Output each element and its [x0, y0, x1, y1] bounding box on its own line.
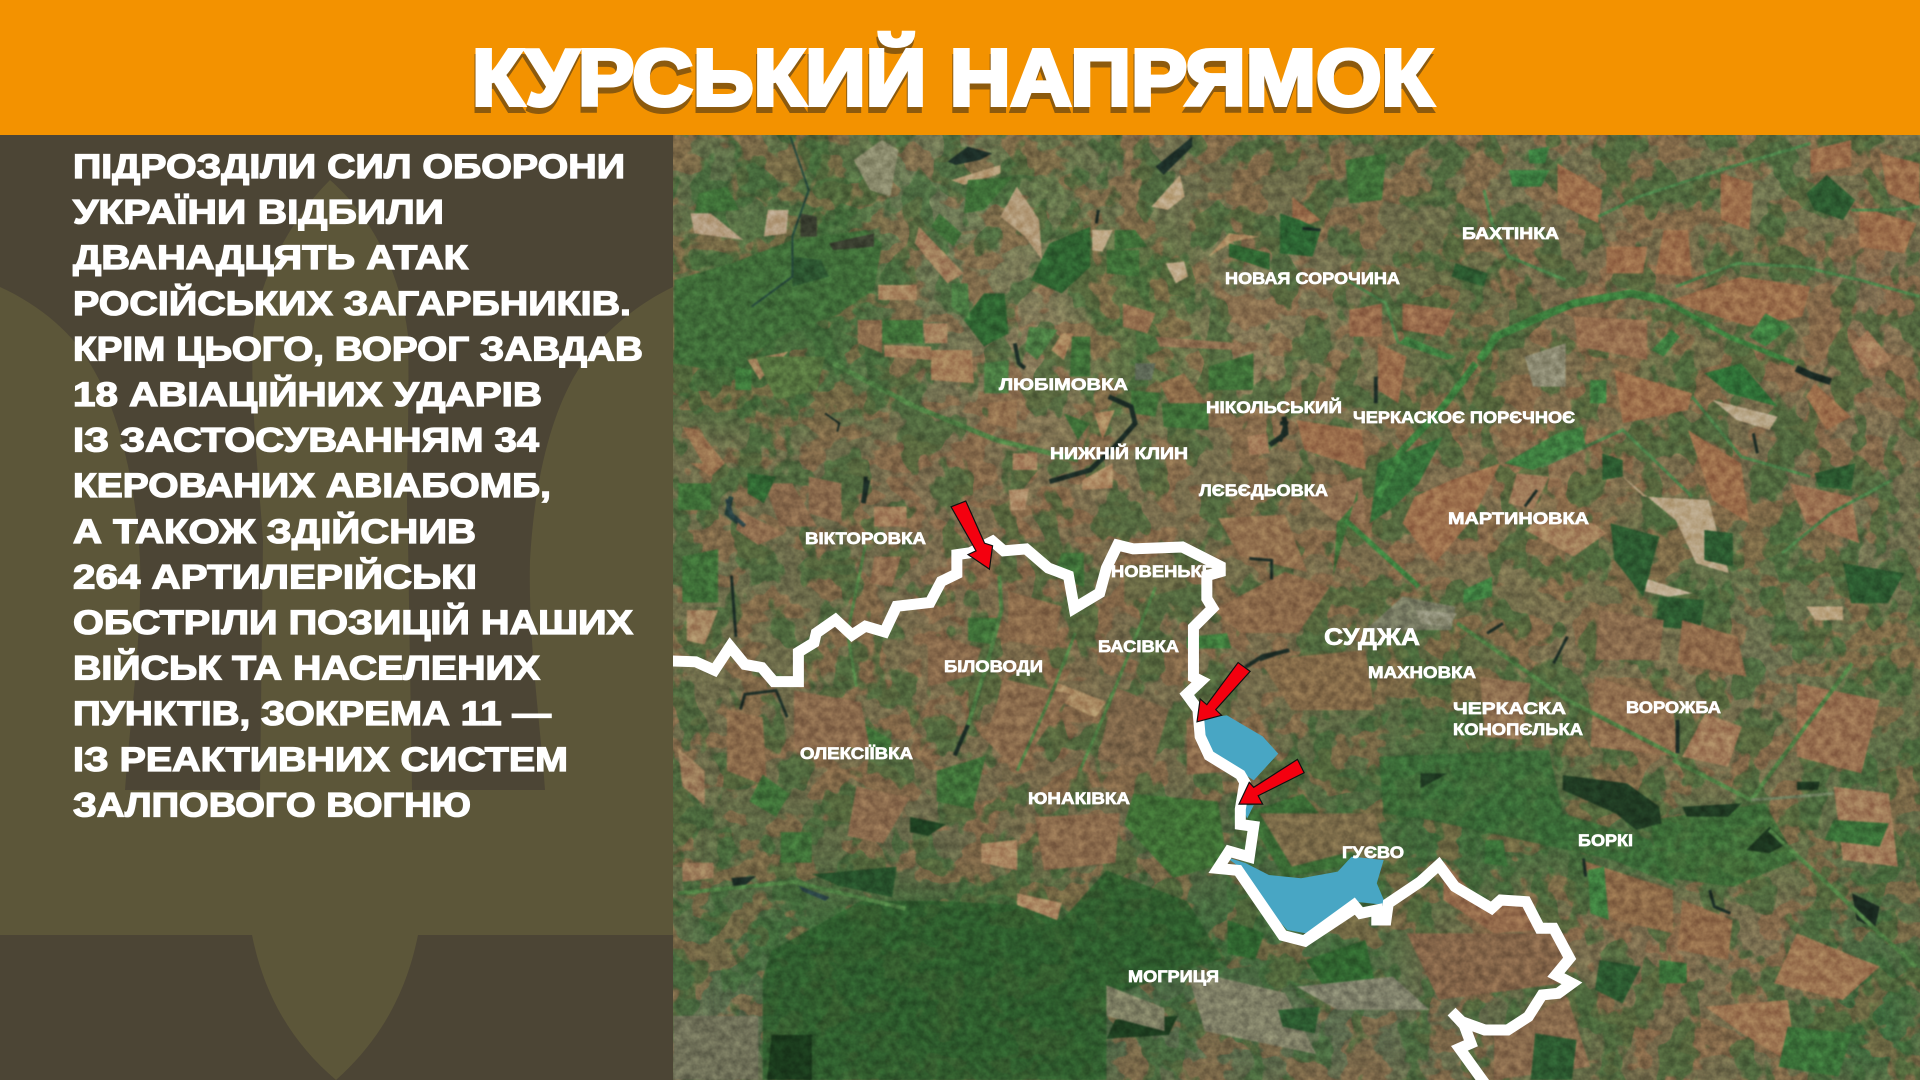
panel: left text panel [0, 135, 673, 1080]
map labels: settlements: МОГРИЦЯ [1128, 967, 1219, 986]
arrow: red attack arrow south [1239, 759, 1304, 804]
map labels: settlements: ЮНАКІВКА [1028, 789, 1130, 808]
text block: summary paragraph: УКРАЇНИ ВІДБИЛИ [73, 194, 444, 232]
map patches: south-east fields and forest [1228, 607, 1916, 1080]
map labels: settlements: СУДЖА [1324, 624, 1420, 651]
map: white front line west section [664, 541, 1572, 1080]
title: КУРСЬКИЙ НАПРЯМОК [471, 38, 1432, 128]
map labels: settlements: БІЛОВОДИ [944, 657, 1043, 676]
map labels: settlements [800, 224, 1721, 986]
panel: orange title band [0, 0, 1920, 135]
text block: summary paragraph: ІЗ РЕАКТИВНИХ СИСТЕМ [73, 741, 568, 779]
text block: summary paragraph: ЗАЛПОВОГО ВОГНЮ [73, 786, 471, 824]
map labels: settlements: ОЛЕКСІЇВКА [800, 744, 913, 763]
text block: summary paragraph: 264 АРТИЛЕРІЙСЬКІ [73, 557, 477, 596]
map patches: north-east fields [1280, 140, 1920, 630]
map labels: settlements: МАХНОВКА [1368, 663, 1476, 682]
text block: summary paragraph: ПІДРОЗДІЛИ СИЛ ОБОРОНИ [73, 148, 625, 186]
map labels: settlements: ВІКТОРОВКА [805, 529, 926, 548]
text block: summary paragraph [73, 148, 643, 824]
map labels: settlements: ЛЄБЄДЬОВКА [1199, 481, 1328, 500]
text block: summary paragraph: КЕРОВАНИХ АВІАБОМБ, [73, 467, 551, 505]
map labels: settlements: ЧЕРКАСКОЄ ПОРЄЧНОЄ [1353, 408, 1575, 427]
arrow: red attack arrow north [951, 501, 993, 569]
text block: summary paragraph: ДВАНАДЦЯТЬ АТАК [73, 239, 468, 277]
text block: summary paragraph: А ТАКОЖ ЗДІЙСНИВ [73, 512, 476, 551]
text block: summary paragraph: КРІМ ЦЬОГО, ВОРОГ ЗАВДАВ [73, 330, 643, 368]
map texture: organic brown field patches [673, 135, 1920, 1080]
map labels: settlements: БОРКІ [1578, 831, 1633, 850]
text block: summary paragraph: ПУНКТІВ, ЗОКРЕМА 11 — [73, 695, 551, 733]
map labels: settlements: ЛЮБІМОВКА [999, 375, 1128, 394]
text block: summary paragraph: ВІЙСЬК ТА НАСЕЛЕНИХ [73, 649, 540, 688]
map texture: fine grain overlay [673, 135, 1920, 1080]
map labels: settlements: ЧЕРКАСКА [1453, 699, 1566, 718]
map labels: settlements: ВОРОЖБА [1626, 698, 1721, 717]
map labels: settlements: НІКОЛЬСЬКИЙ [1206, 398, 1342, 417]
text block: summary paragraph: ОБСТРІЛИ ПОЗИЦІЙ НАШИХ [73, 603, 633, 642]
map labels: settlements: БАСІВКА [1098, 637, 1179, 656]
text block: summary paragraph: 18 АВІАЦІЙНИХ УДАРІВ [73, 375, 542, 414]
map: captured territory in blue [1193, 692, 1386, 933]
map: white front line east section [1306, 865, 1572, 1080]
icon: trident watermark [0, 180, 673, 1080]
map labels: settlements: НОВАЯ СОРОЧИНА [1225, 269, 1400, 288]
map patches: north-west fields [674, 137, 1286, 530]
arrow: red attack arrow middle [1197, 663, 1250, 722]
map labels: settlements: НОВЕНЬКЕ [1111, 562, 1214, 581]
map texture: organic green vegetation patches [673, 135, 1920, 1080]
map labels: settlements: ГУЄВО [1342, 843, 1404, 862]
map patches: south-west fields and forest [673, 480, 1360, 1080]
map labels: settlements: БАХТІНКА [1462, 224, 1559, 243]
title: КУРСЬКИЙ НАПРЯМОК [472, 32, 1433, 122]
map labels: settlements: КОНОПЄЛЬКА [1453, 720, 1583, 739]
map labels: settlements: МАРТИНОВКА [1448, 509, 1589, 528]
text block: summary paragraph: ІЗ ЗАСТОСУВАННЯМ 34 [73, 422, 539, 460]
map: satellite background [664, 135, 1920, 1080]
text block: summary paragraph: РОСІЙСЬКИХ ЗАГАРБНИКІВ. [73, 284, 631, 323]
map labels: settlements: НИЖНІЙ КЛИН [1050, 444, 1188, 463]
